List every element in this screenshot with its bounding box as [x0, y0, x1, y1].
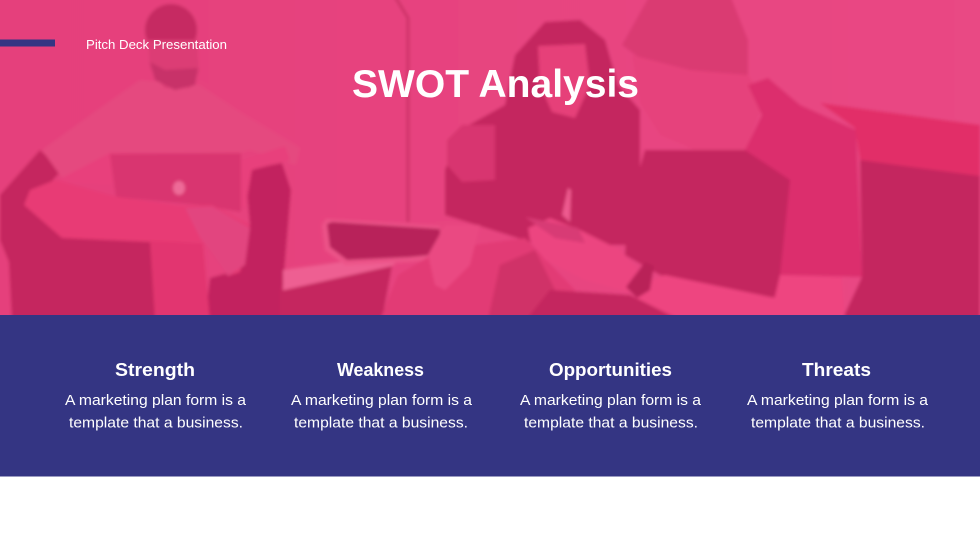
column: threats: Threats [802, 360, 871, 380]
panel: SWOT columns [0, 315, 980, 476]
column: strength [65, 360, 247, 432]
column: strength: A marketing plan form is a [65, 392, 247, 409]
column: weakness [291, 360, 473, 432]
column: strength: template that a business. [69, 414, 243, 432]
column: opportunities [520, 360, 702, 432]
column: opportunities: template that a business. [524, 414, 698, 432]
column: opportunities: A marketing plan form is a [520, 392, 702, 409]
accent bar [0, 40, 55, 46]
title: SWOT Analysis [352, 63, 639, 106]
column: weakness: template that a business. [294, 414, 468, 432]
column: threats [747, 360, 929, 432]
deck label: Pitch Deck Presentation [86, 37, 227, 52]
column: weakness: A marketing plan form is a [291, 392, 473, 409]
column: weakness: Weakness [337, 360, 424, 380]
column: opportunities: Opportunities [549, 360, 672, 380]
column: strength: Strength [115, 360, 195, 380]
column: threats: template that a business. [751, 414, 925, 432]
duotone photo: three people in a meeting [0, 0, 980, 325]
column: threats: A marketing plan form is a [747, 392, 929, 409]
